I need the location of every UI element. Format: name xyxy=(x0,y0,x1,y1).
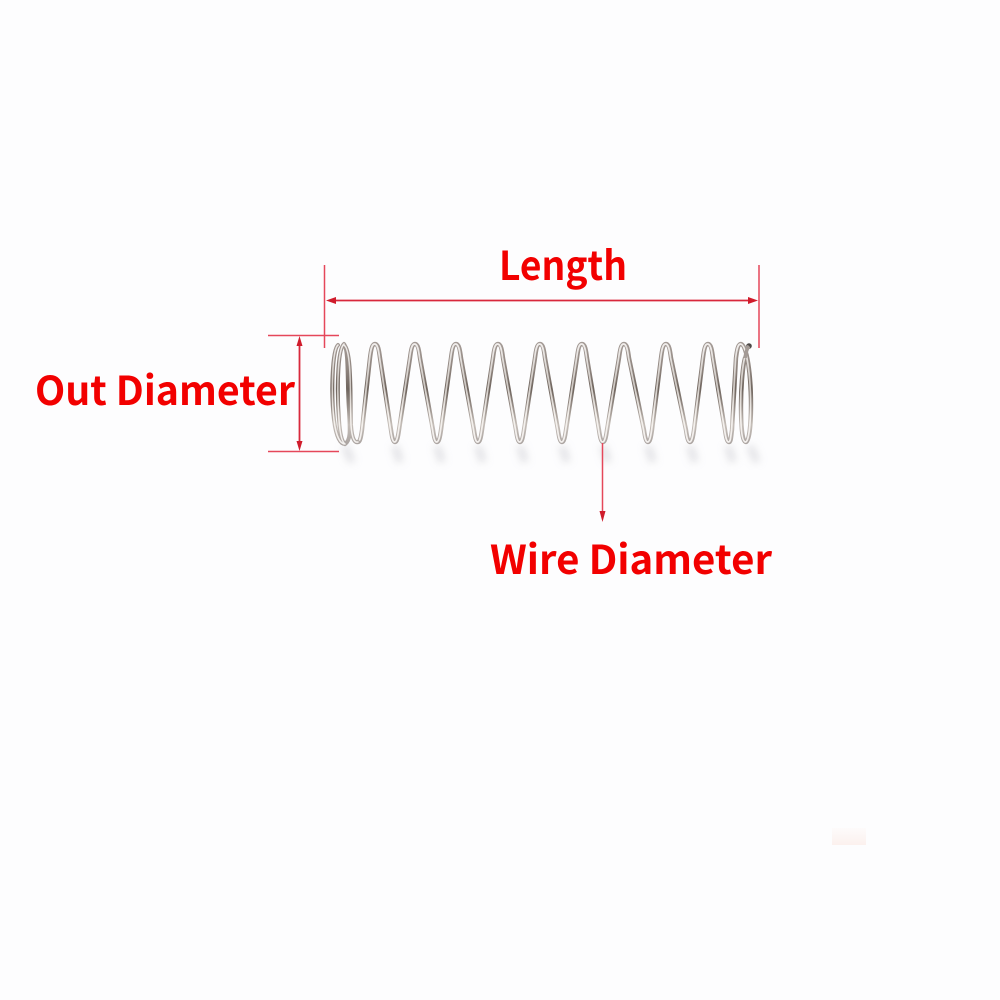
spring shadow xyxy=(345,446,757,462)
diameter arrow xyxy=(296,336,302,451)
spring coil xyxy=(332,344,751,444)
dimension: out diameter xyxy=(35,336,339,452)
wire label: Wire Diameter xyxy=(490,528,773,586)
diameter label: Out Diameter xyxy=(35,359,296,417)
dimension: length xyxy=(324,234,759,348)
dimension: wire diameter xyxy=(490,443,773,586)
spring xyxy=(332,343,757,462)
length extension lines xyxy=(324,265,759,348)
faint smudge xyxy=(832,828,866,845)
length arrow xyxy=(326,297,758,304)
wire end xyxy=(746,343,752,349)
diameter extension lines xyxy=(268,336,339,452)
length label: Length xyxy=(499,234,627,292)
wire pointer arrow xyxy=(600,443,606,522)
